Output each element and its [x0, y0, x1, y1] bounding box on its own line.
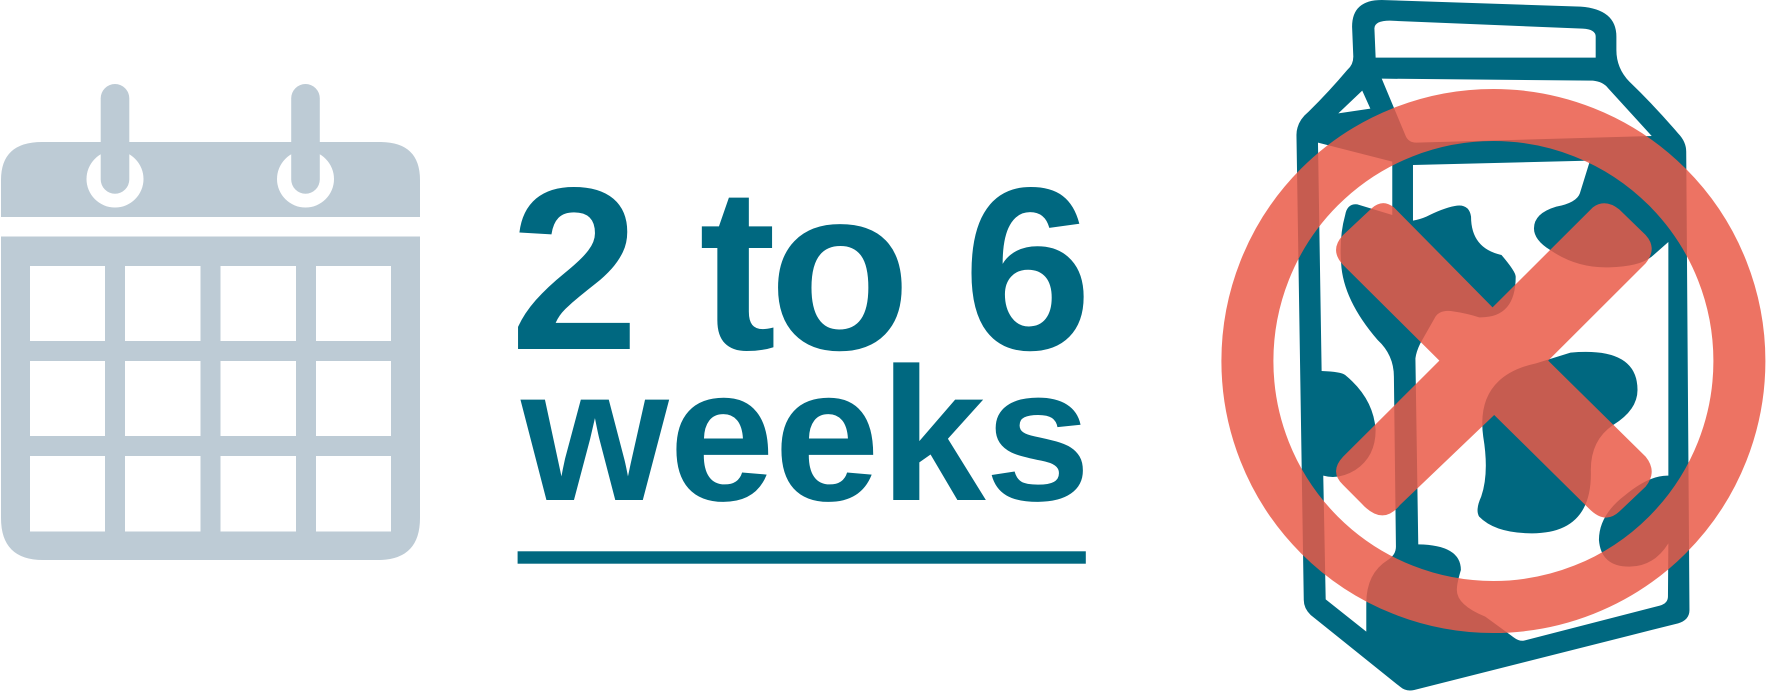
- text: weeks: weeks: [520, 329, 1091, 541]
- calendar body grid: [1, 236, 420, 560]
- carton top panel: [1374, 21, 1596, 58]
- icon: milk carton crossed out: [1247, 0, 1739, 691]
- underline rule: [518, 551, 1086, 564]
- calendar binding rings: [101, 84, 320, 194]
- text: 2 to 6: 2 to 6: [510, 140, 1092, 399]
- carton roof panel: [1382, 79, 1652, 143]
- milk carton: [1296, 0, 1689, 691]
- calendar header band: [1, 142, 420, 217]
- calendar binding holes: [86, 150, 334, 208]
- carton silhouette: [1296, 0, 1689, 691]
- carton left panel with cow spots: [1318, 143, 1396, 632]
- prohibition cross: [1336, 203, 1652, 518]
- heading: duration: [510, 140, 1092, 564]
- cow spot: [1478, 352, 1638, 533]
- prohibition sign: [1247, 115, 1739, 607]
- carton front panel with cow spots: [1413, 161, 1668, 641]
- icon: calendar: [1, 84, 420, 560]
- carton side triangle: [1338, 91, 1370, 113]
- prohibition ring: [1247, 115, 1739, 607]
